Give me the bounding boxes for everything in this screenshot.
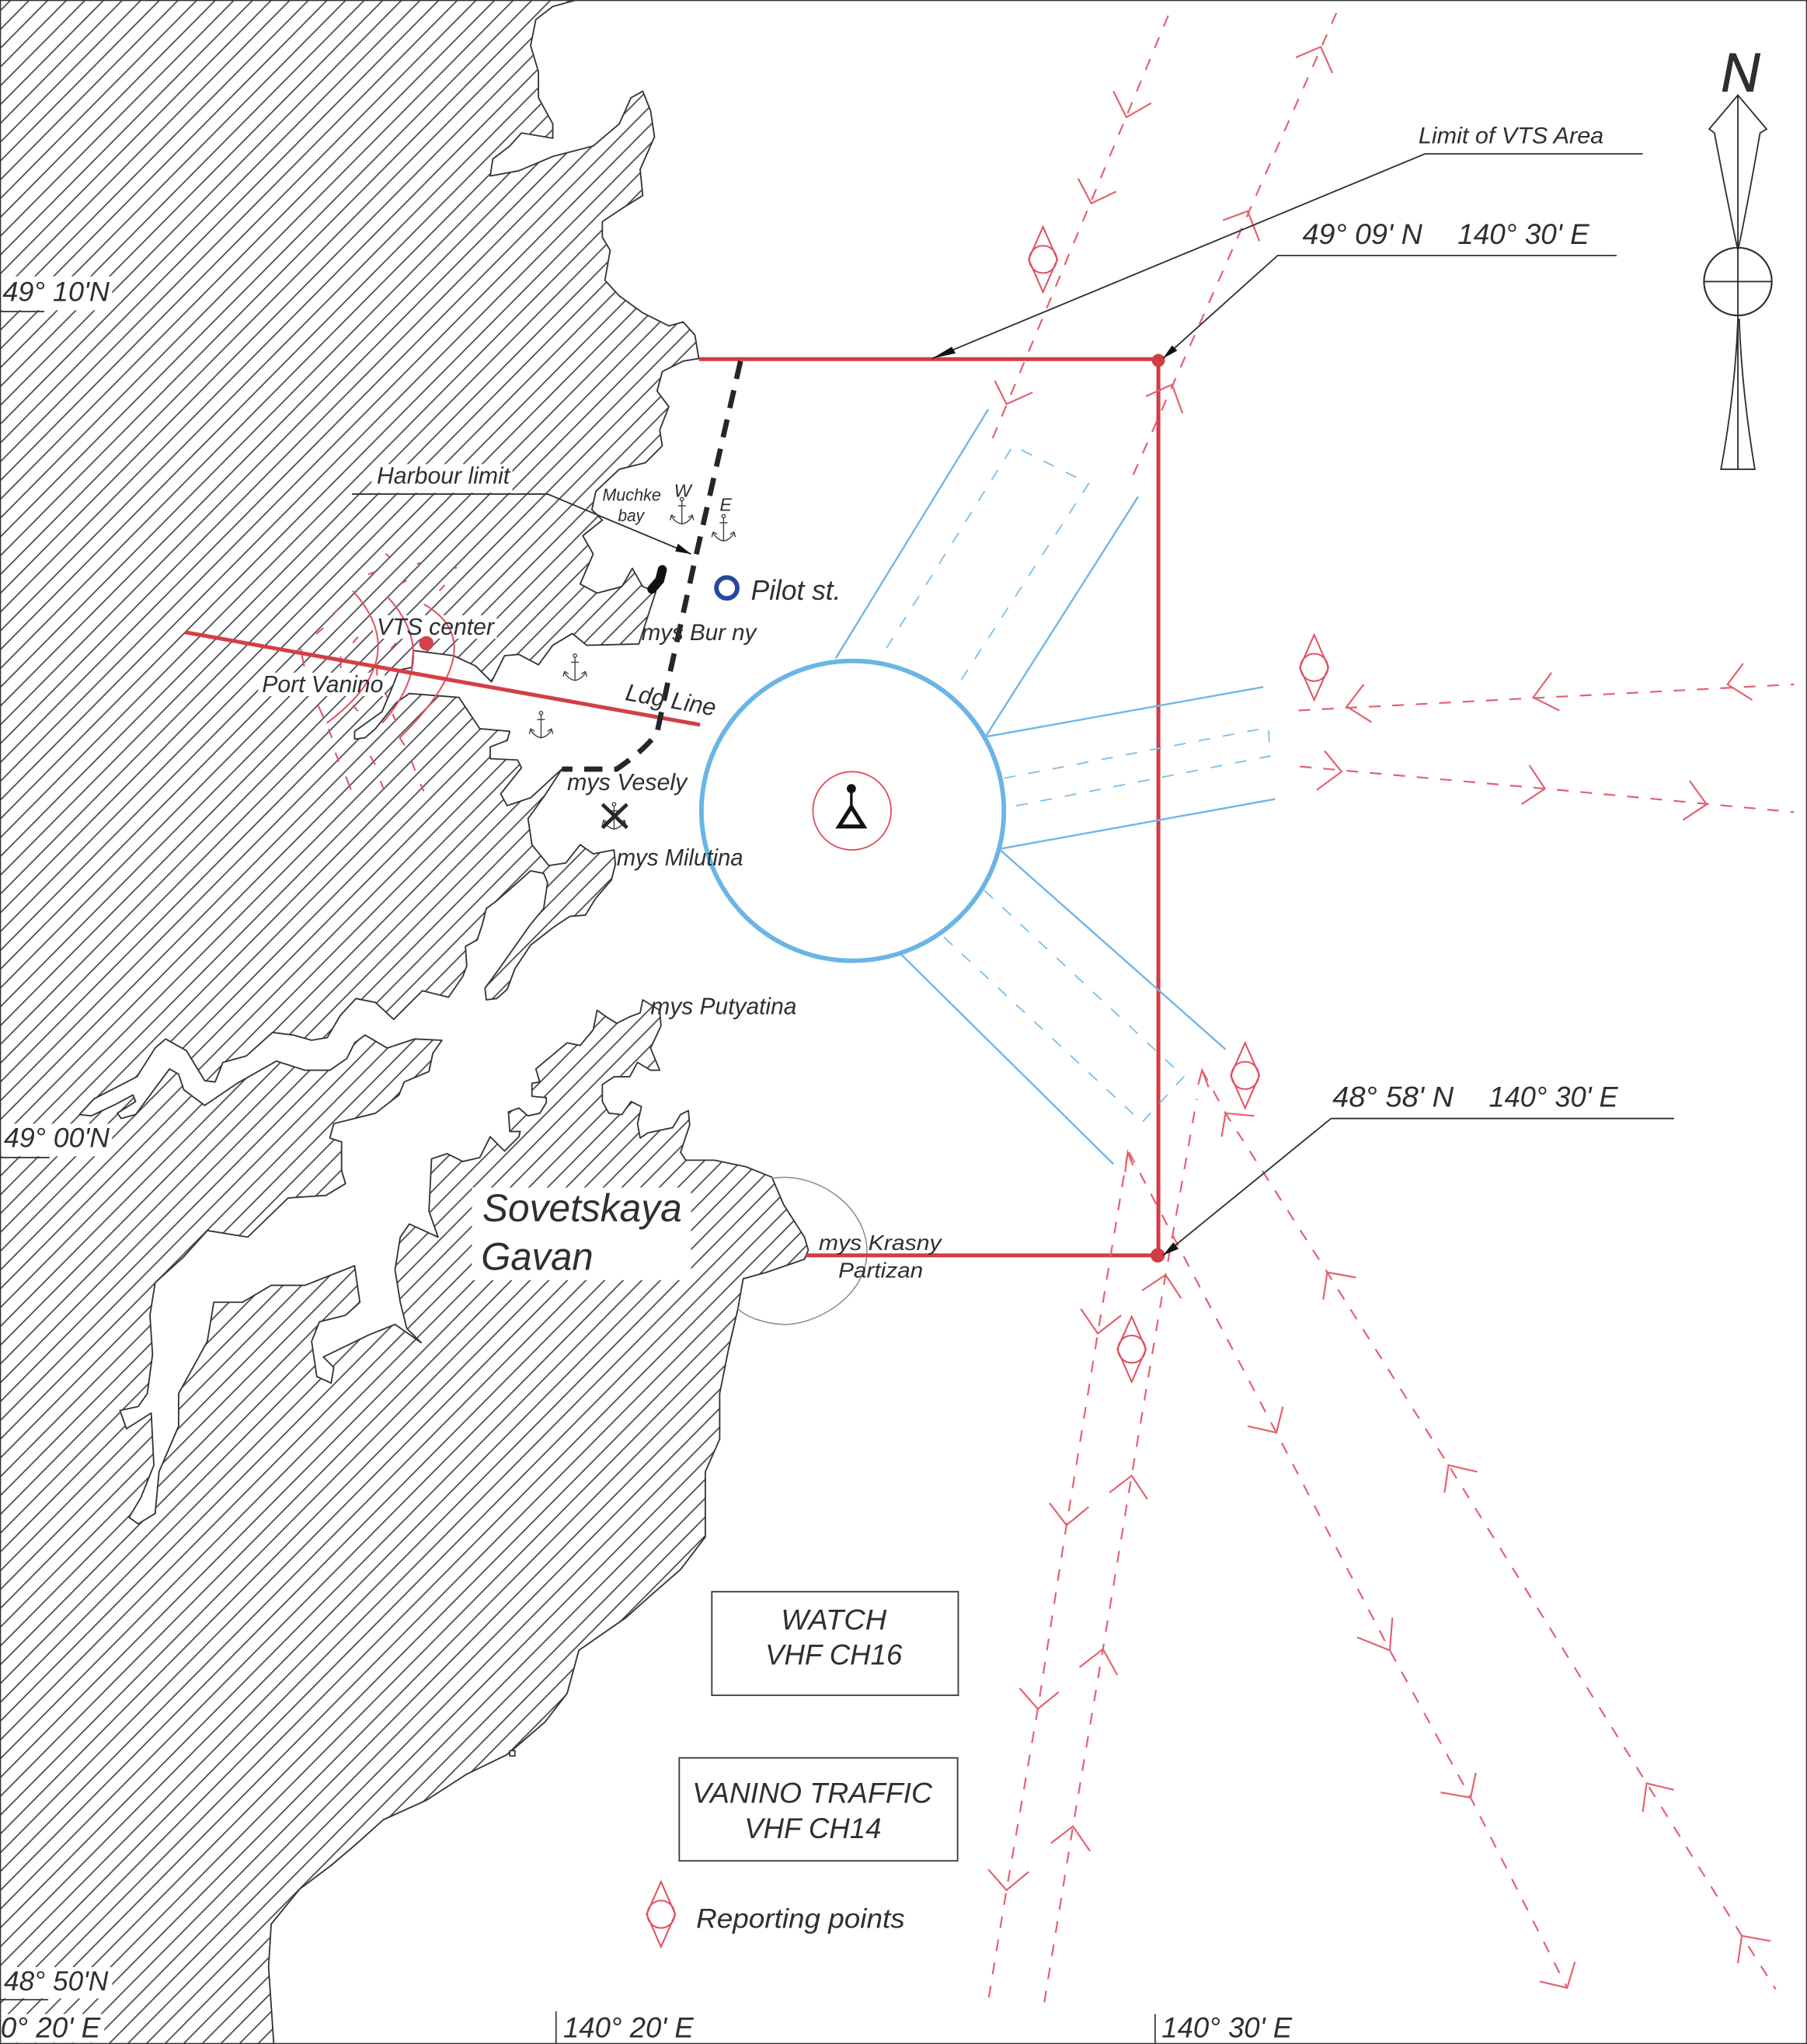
box: watch VHF CH16 xyxy=(712,1592,958,1695)
VTS radar sectors at Port Vanino xyxy=(301,554,457,792)
reporting point symbols xyxy=(1029,227,1328,1382)
latitude labels: 49° 10'N xyxy=(2,277,110,308)
callout: harbour limit: Harbour limit xyxy=(377,464,511,489)
place names: W xyxy=(674,480,694,500)
box: watch VHF CH16: VHF CH16 xyxy=(765,1639,903,1671)
place names: Muchke xyxy=(602,485,661,504)
leading line xyxy=(185,632,700,725)
small rock off coast xyxy=(510,1750,515,1756)
place names xyxy=(262,480,943,1282)
route: southeast outbound lane xyxy=(1129,1152,1575,1988)
route: northern southbound lane xyxy=(990,16,1168,446)
land mass with hatching xyxy=(0,0,808,2044)
latitude labels: 49° 00'N xyxy=(4,1123,110,1154)
route: southeast inbound lane xyxy=(1198,1071,1776,1990)
place names: Pilot st. xyxy=(751,574,841,606)
berth blob xyxy=(652,569,663,589)
VTS center dot xyxy=(420,636,433,650)
place names: Ldg Line xyxy=(624,678,718,721)
place names: Gavan xyxy=(481,1234,594,1278)
anchorage symbols xyxy=(529,497,736,829)
coastal circle at mys Krasny Partizan xyxy=(738,1177,867,1325)
buoy symbol xyxy=(839,784,864,827)
traffic separation channels, blue xyxy=(836,409,1275,1164)
callout: south corner coordinates: 140° 30' E xyxy=(1489,1081,1618,1113)
route: eastern eastbound lane xyxy=(1300,750,1794,820)
buoy ring xyxy=(813,771,891,850)
legend: reporting points: Reporting points xyxy=(696,1904,905,1934)
pilot boarding circle xyxy=(702,661,1004,961)
box: Vanino Traffic VHF CH14: VHF CH14 xyxy=(744,1812,881,1844)
place names: Port Vanino xyxy=(262,672,383,698)
place names: mys Putyatina xyxy=(650,994,796,1019)
longitude labels xyxy=(0,2011,1292,2044)
callout: north corner coordinates: 49° 09' N xyxy=(1303,218,1422,250)
callout: limit of VTS area: Limit of VTS Area xyxy=(1419,124,1603,149)
north arrow: N xyxy=(1721,41,1760,103)
callout: south corner coordinates xyxy=(1163,1081,1674,1255)
VTS area limit boundary xyxy=(699,354,1165,1262)
callout: north corner coordinates xyxy=(1163,218,1617,358)
latitude labels: 48° 50'N xyxy=(4,1966,109,1997)
route: eastern westbound lane xyxy=(1298,663,1794,723)
callout: limit of VTS area xyxy=(932,124,1643,358)
route: southern northbound lane xyxy=(1044,1099,1197,2002)
place names: mys Milutina xyxy=(617,845,743,871)
prohibited anchorage cross xyxy=(602,804,627,827)
callout: harbour limit xyxy=(352,464,691,554)
callout: south corner coordinates: 48° 58' N xyxy=(1332,1081,1454,1113)
box: Vanino Traffic VHF CH14: VANINO TRAFFIC xyxy=(692,1778,932,1809)
place names: VTS center xyxy=(377,615,496,640)
box: watch VHF CH16: WATCH xyxy=(781,1604,887,1635)
place names: mys Vesely xyxy=(567,770,688,796)
place names: Partizan xyxy=(838,1258,923,1282)
place names: Sovetskaya xyxy=(482,1186,682,1230)
north arrow xyxy=(1704,41,1772,469)
longitude labels: 140° 30' E xyxy=(1161,2012,1292,2044)
legend: reporting points xyxy=(646,1882,905,1947)
place names: mys Bur ny xyxy=(642,620,758,646)
latitude labels xyxy=(0,277,110,2000)
place names: E xyxy=(719,495,732,515)
route: northern northbound lane xyxy=(1132,13,1336,479)
callout: north corner coordinates: 140° 30' E xyxy=(1457,218,1589,250)
harbour limit dashed line xyxy=(562,361,740,769)
label knockouts in land hatching xyxy=(0,277,691,2042)
place names: bay xyxy=(618,506,645,525)
longitude labels: 140° 20' E xyxy=(563,2012,694,2044)
place names: mys Krasny xyxy=(819,1231,943,1255)
pilot station marker xyxy=(716,577,737,598)
box: Vanino Traffic VHF CH14 xyxy=(679,1758,958,1861)
route: southern southbound lane west xyxy=(987,1152,1133,2009)
